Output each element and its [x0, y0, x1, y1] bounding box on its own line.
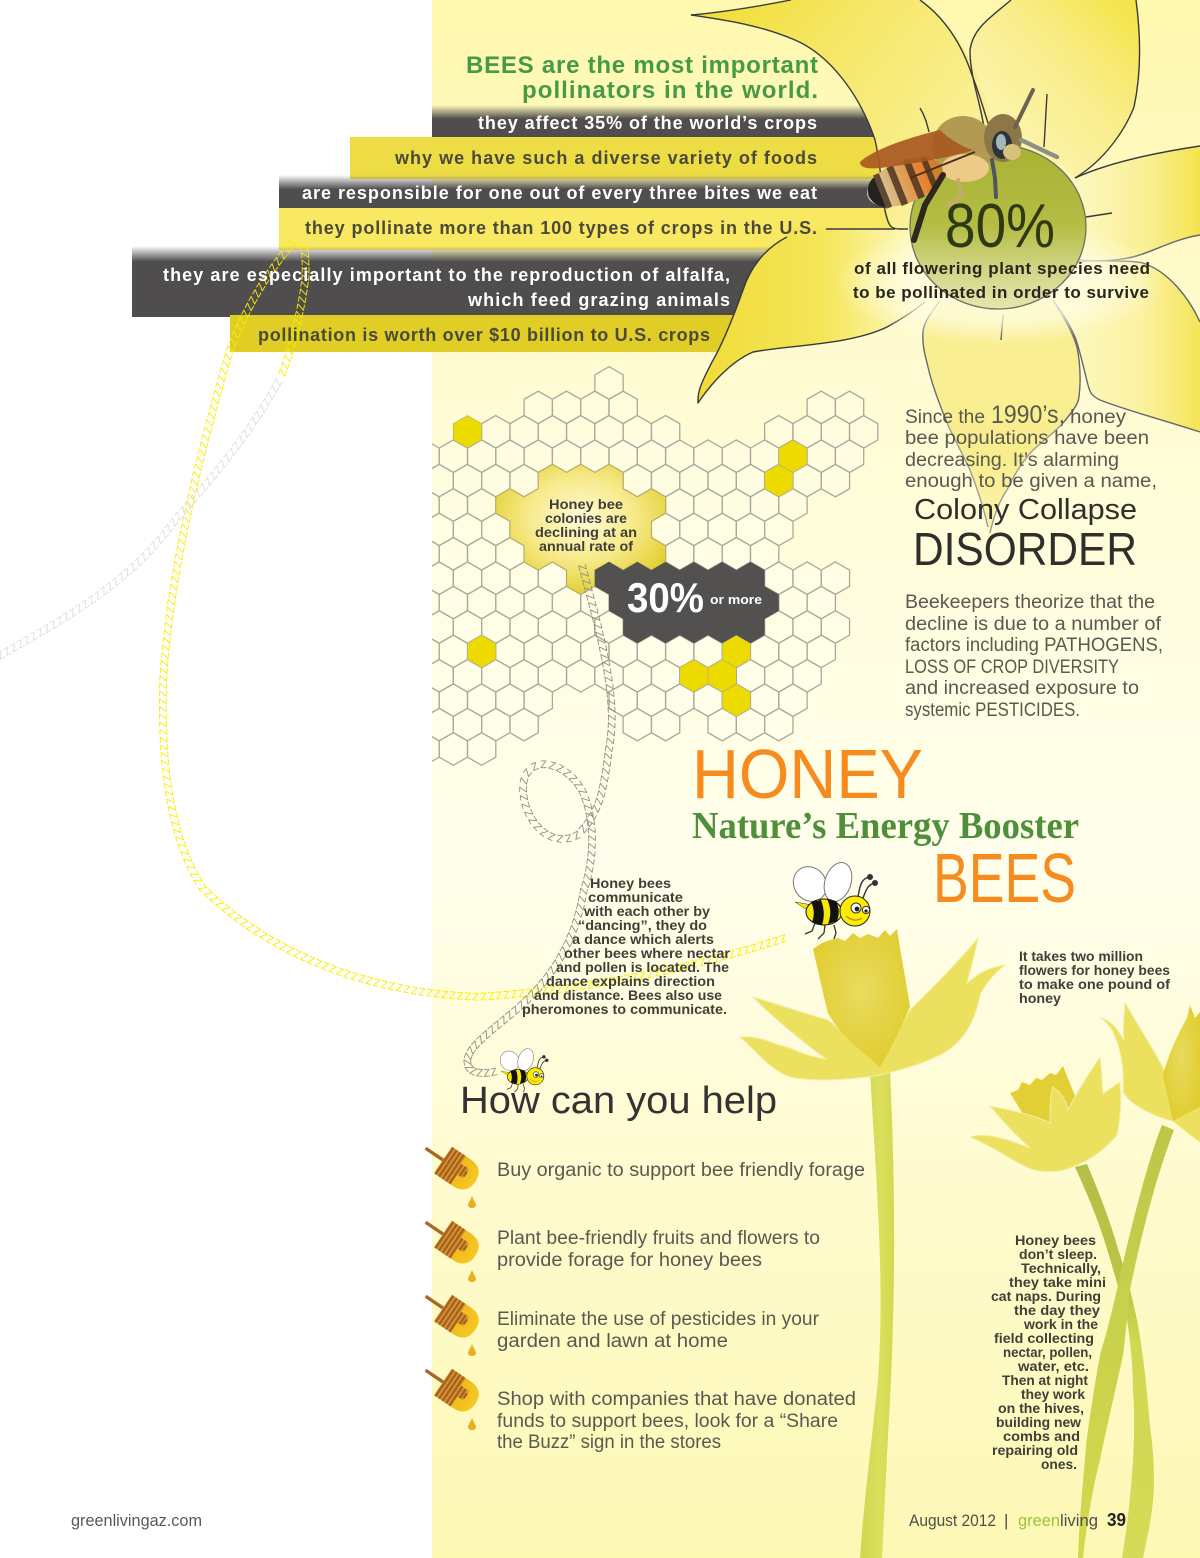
- fact: alfalfa line 1: they are especially important to the reproduction of alfalfa,: [163, 265, 730, 285]
- fact: crops: they affect 35% of the world’s crops: [478, 113, 817, 133]
- heading: bees are pollinators: [466, 52, 818, 104]
- line 8: dance explains direction: [546, 973, 715, 989]
- line 10: pheromones to communicate.: [522, 1001, 727, 1017]
- line 1: Honey bees: [1015, 1232, 1096, 1248]
- honey dipper icon 2: [417, 1209, 484, 1282]
- disorder heading: DISORDER: [913, 523, 1137, 575]
- small daffodil: [970, 1057, 1121, 1172]
- upper segment path: [285, 243, 309, 377]
- line 8: field collecting: [994, 1330, 1094, 1346]
- line 5: a dance which alerts: [572, 931, 714, 947]
- faint buzz trail: ZZZZZZZZZZZZZZZZZZZZZZZZZZZZZZZZZZZZZZZZZZZZZZZZZZZZZZZZZZZZZZZZZZZZZ: [0, 378, 282, 660]
- petal bottom: [923, 300, 1080, 590]
- separator: |: [1004, 1511, 1008, 1530]
- line 4: honey: [1019, 990, 1061, 1006]
- line 2: decline is due to a number of: [905, 614, 1162, 635]
- cartoon bee: [787, 859, 878, 939]
- how can you help heading: How can you help: [460, 1080, 777, 1122]
- cup: [813, 929, 910, 1067]
- line 1: Beekeepers theorize that the: [905, 592, 1155, 613]
- year: 1990’s,: [991, 401, 1065, 429]
- right daffodil: [1078, 1002, 1200, 1558]
- line 4: enough to be given a name,: [905, 471, 1157, 492]
- honey: honey: [1070, 407, 1127, 428]
- line 3: Technically,: [1021, 1260, 1101, 1276]
- stem: [1078, 1125, 1174, 1558]
- line 1: It takes two million: [1019, 948, 1143, 964]
- petals: [970, 1057, 1121, 1172]
- stat caption: [853, 259, 1150, 302]
- fact: 100 crops: they pollinate more than 100 types of crops in the U.S.: [305, 218, 817, 238]
- line 2: garden and lawn at home: [497, 1331, 728, 1352]
- two million flowers text: [1019, 948, 1170, 1006]
- caption line 1: of all flowering plant species need: [854, 259, 1150, 278]
- cup: [1010, 1066, 1075, 1125]
- line 4: they take mini: [1009, 1274, 1106, 1290]
- honey dipper icon 1: [417, 1135, 484, 1208]
- tip 1: Buy organic to support bee friendly forage: [497, 1160, 865, 1181]
- bar fact texts: [163, 113, 817, 345]
- fact: value: pollination is worth over $10 billion to U.S. crops: [258, 325, 710, 345]
- faint trail path: [0, 377, 285, 660]
- line 5: cat naps. During: [991, 1288, 1101, 1304]
- line 6: other bees where nectar: [564, 945, 731, 961]
- caption line 2: to be pollinated in order to survive: [853, 283, 1149, 302]
- line 4: “dancing”, they do: [578, 917, 707, 933]
- fact: bites: are responsible for one out of every three bites we eat: [302, 183, 817, 203]
- line 4: LOSS OF CROP DIVERSITY: [905, 657, 1119, 678]
- tip 2: [497, 1228, 820, 1271]
- dark hexagon callout cluster: [595, 562, 779, 643]
- head: [984, 114, 1022, 162]
- gold callout text: [535, 496, 637, 554]
- line 4: annual rate of: [539, 538, 633, 554]
- filled yellow honeycomb cells: [453, 416, 807, 716]
- petals: [1100, 1002, 1175, 1122]
- line 1: Eliminate the use of pesticides in your: [497, 1309, 820, 1330]
- honey dipper icon 4: [417, 1357, 484, 1430]
- grey trail path: [464, 565, 608, 1077]
- bar 2: [350, 137, 900, 179]
- nature's energy booster subtitle: Nature’s Energy Booster: [692, 805, 1079, 847]
- 80 percent stat: 80%: [945, 192, 1055, 261]
- fact: foods: why we have such a diverse variety of foods: [394, 148, 817, 168]
- line 3: decreasing. It’s alarming: [905, 450, 1119, 471]
- large daffodil: [740, 929, 1005, 1558]
- faint buzz trail: [0, 378, 282, 660]
- bees title: BEES: [933, 839, 1076, 917]
- line 3: declining at an: [535, 524, 637, 540]
- cup: [1163, 1005, 1200, 1121]
- line 1: Honey bees: [590, 875, 671, 891]
- line 2: colonies are: [545, 510, 627, 526]
- since: Since the: [905, 407, 985, 428]
- line 11: Then at night: [1002, 1372, 1088, 1388]
- line 2: flowers for honey bees: [1019, 962, 1170, 978]
- line 15: combs and: [1003, 1428, 1080, 1444]
- bar 1: [432, 105, 892, 138]
- heading line 2: pollinators in the world.: [522, 77, 818, 104]
- magazine name dark: living: [1060, 1511, 1098, 1530]
- line 12: they work: [1021, 1386, 1085, 1402]
- line 17: ones.: [1041, 1456, 1077, 1472]
- line 7: and pollen is located. The: [556, 959, 729, 975]
- line 1: Honey bee: [549, 496, 623, 512]
- stem: [860, 1070, 894, 1558]
- petal top: [970, 0, 1140, 178]
- grey buzz trail with loop: [463, 564, 616, 1077]
- line 2: provide forage for honey bees: [497, 1250, 762, 1271]
- colony collapse heading: Colony Collapse: [914, 494, 1137, 526]
- or more label: or more: [710, 592, 762, 607]
- front petal: [1173, 1107, 1200, 1142]
- petal right: [1075, 146, 1200, 262]
- heading line 1: BEES are the most important: [466, 52, 818, 79]
- gold hexagon callout cluster: [496, 464, 666, 594]
- honey bee illustration: [860, 90, 1057, 240]
- line 9: nectar, pollen,: [1003, 1344, 1092, 1360]
- line 13: on the hives,: [998, 1400, 1084, 1416]
- magazine name green: green: [1018, 1511, 1060, 1530]
- line 3: with each other by: [583, 903, 710, 919]
- bar 4: [279, 208, 909, 250]
- petal lower right: [1053, 262, 1200, 432]
- bees don't sleep text: [991, 1232, 1106, 1472]
- line 2: bee populations have been: [905, 428, 1149, 449]
- yellow buzz trail: ZZZZZZZZZZZZZZZZZZZZZZZZZZZZZZZZZZZZZZZZZZZZZZZZZZZZZZZZZZZZZZZZZZZZZZZZZZZZZZZZZZZZZZZZZZZZZZZZZZZZZZZZZZZZZZZZZZZZZZZZZZZZZZZZZZZZZZZZZZZZZZZZZZZZZZZZZZZZZZZZZZZZZZZZZZZZZZZZZZZZZZZZZZZZZZZZZZZZZZZZZZZZZZZZZZZZZZZZZZZZZZ: [159, 238, 787, 1000]
- line 2: don’t sleep.: [1019, 1246, 1097, 1262]
- footer folio: [909, 1510, 1126, 1530]
- honeycomb grid: [411, 367, 878, 765]
- line 6: systemic PESTICIDES.: [905, 700, 1080, 721]
- abdomen: [860, 148, 950, 216]
- bee dance text: [522, 875, 731, 1017]
- line 9: and distance. Bees also use: [534, 987, 722, 1003]
- white glow below flower center: [835, 220, 1165, 344]
- petal lower left: [698, 229, 1000, 403]
- page number: 39: [1107, 1510, 1126, 1530]
- petal outlines: [691, 0, 1200, 533]
- line 3: to make one pound of: [1019, 976, 1170, 992]
- legs and antennae: [914, 90, 1057, 240]
- line 10: water, etc.: [1017, 1358, 1089, 1374]
- line 16: repairing old: [992, 1442, 1078, 1458]
- date: August 2012: [909, 1511, 996, 1530]
- tip 3: [497, 1309, 820, 1352]
- line 3: factors including PATHOGENS,: [905, 635, 1163, 656]
- line 14: building new: [996, 1414, 1081, 1430]
- line 5: and increased exposure to: [905, 678, 1139, 699]
- beekeepers paragraph: [905, 592, 1163, 721]
- line 1: Shop with companies that have donated: [497, 1389, 856, 1410]
- petal upper left: [691, 0, 992, 229]
- yellow page background panel: [432, 0, 1200, 1558]
- thorax: [932, 116, 994, 176]
- line 7: work in the: [1023, 1316, 1098, 1332]
- colony collapse intro text: [905, 401, 1157, 492]
- flower center circle: [910, 145, 1086, 309]
- yellow buzz trail: [159, 238, 787, 1000]
- honey title: HONEY: [692, 735, 923, 813]
- outer petals: [740, 938, 1005, 1080]
- bar 6: [230, 315, 750, 352]
- fact: alfalfa line 2: which feed grazing animals: [467, 290, 730, 310]
- big flower: [691, 0, 1200, 590]
- left stem of small daffodil: [1075, 1164, 1154, 1558]
- yellow buzz trail upper segment: [278, 244, 310, 377]
- footer website: greenlivingaz.com: [71, 1511, 202, 1530]
- trail path to bee: [167, 240, 785, 993]
- wing: [860, 130, 973, 168]
- 30 percent stat: 30%: [627, 574, 704, 621]
- line 2: funds to support bees, look for a “Share: [497, 1411, 838, 1432]
- grey buzz trail with loop: ZZZZZZZZZZZZZZZZZZZZZZZZZZZZZZZZZZZZZZZZZZZZZZZZZZZZZZZZZZZZZZZZZZZZZZZZZZZZZZZZZZZZZZZZZZZZZZZZZZZZZZZZZZZZZZZZZZZZZZZZZZZZZZZZZZ: [463, 564, 616, 1077]
- line 1: Plant bee-friendly fruits and flowers to: [497, 1228, 820, 1249]
- line 2: communicate: [588, 889, 683, 905]
- line 6: the day they: [1014, 1302, 1100, 1318]
- tip 4: [497, 1389, 856, 1453]
- small cartoon bee: [496, 1047, 548, 1092]
- bar 3: [279, 175, 899, 209]
- honey dipper icon 3: [417, 1283, 484, 1356]
- empty honeycomb cells: [411, 367, 878, 765]
- line 3: the Buzz” sign in the stores: [497, 1432, 721, 1453]
- bar 5: [132, 246, 772, 317]
